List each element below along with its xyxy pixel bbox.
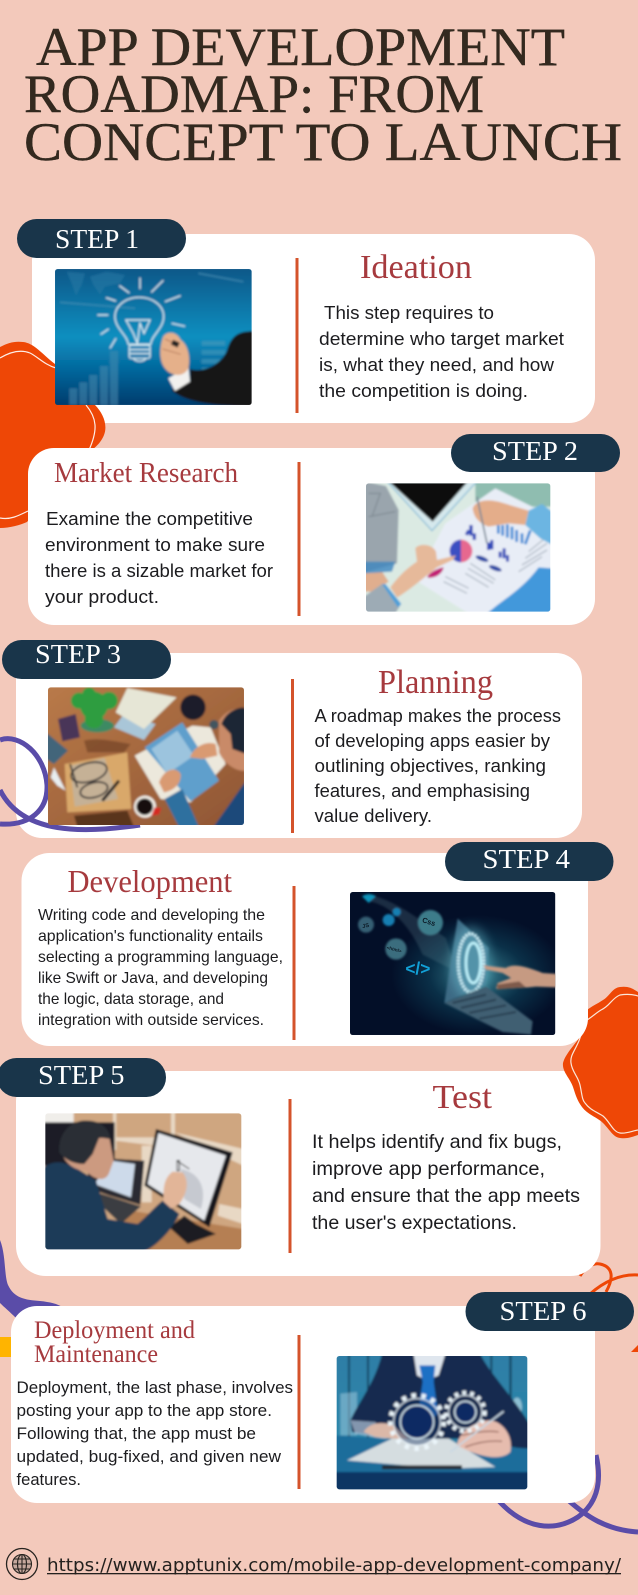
panel: step 4 development [22, 842, 614, 1046]
divider [298, 1335, 300, 1489]
body text: deployment: Following that, the app must be [16, 1425, 256, 1443]
divider [288, 1099, 292, 1253]
body text: ideation: This step requires to [324, 302, 494, 323]
panel: step 6 deployment and maintenance [11, 1292, 634, 1503]
body text: market research: environment to make sure [45, 534, 265, 555]
heading: market research: Market Research [54, 457, 238, 489]
photo: finger touching laptop with code icons: JS [362, 923, 370, 930]
body text: test: and ensure that the app meets [312, 1185, 580, 1207]
title: APP DEVELOPMENT [36, 17, 565, 77]
heading: development: Development [68, 863, 232, 899]
footer link [6, 1548, 622, 1580]
heading: test: Test [432, 1079, 493, 1116]
title: CONCEPT TO LAUNCH [24, 112, 622, 172]
body text: development [38, 907, 283, 1029]
step 4 badge [445, 842, 614, 881]
divider [296, 258, 298, 413]
decoration: purple loop bottom right [498, 1455, 638, 1532]
body text: planning: outlining objectives, ranking [314, 755, 546, 776]
body text: deployment: Deployment, the last phase, involves [16, 1379, 293, 1397]
heading: ideation: Ideation [360, 249, 472, 286]
body text: deployment: features. [16, 1471, 81, 1489]
decoration: purple loop left [0, 739, 140, 830]
body text: planning: value delivery. [314, 805, 432, 826]
step 6 badge: STEP 6 [500, 1296, 586, 1326]
body text: development: the logic, data storage, and [38, 991, 224, 1008]
decoration: orange squiggle top right [580, 1264, 638, 1352]
photo: finger touching laptop with code icons [350, 892, 557, 1035]
step 4 badge: STEP 4 [482, 844, 571, 874]
body text: ideation: the competition is doing. [319, 380, 528, 401]
body text: deployment: updated, bug-fixed, and given new [16, 1448, 281, 1466]
decoration: purple curve bottom left [0, 1240, 62, 1318]
photo: hands over charts [364, 481, 552, 614]
body text: development: application's functionality entails [38, 928, 263, 945]
body text: market research [45, 508, 273, 607]
photo: finger touching laptop with code icons: Css [421, 915, 437, 928]
body text: market research: there is a sizable market for [45, 560, 273, 581]
panel: step 1 ideation [17, 219, 564, 413]
body text: ideation: determine who target market [319, 328, 564, 349]
divider [292, 886, 296, 1040]
decoration: orange blob right [563, 987, 638, 1138]
body text: planning: of developing apps easier by [314, 730, 551, 751]
body text: market research: your product. [45, 586, 159, 607]
body text: ideation: is, what they need, and how [319, 354, 555, 375]
photo: light bulb drawn by hand [53, 268, 253, 406]
body text: test [312, 1131, 580, 1234]
photo: desk seen from above [46, 685, 246, 827]
photo: businessman with gears [335, 1354, 529, 1491]
photo: man working at monitor [43, 1111, 243, 1251]
step 1 badge [17, 219, 186, 258]
decoration: yellow block left [0, 1337, 14, 1357]
card background: step 5 [16, 1071, 600, 1276]
heading: deployment and maintenance: Deployment and [34, 1317, 195, 1344]
card background: step 1 [32, 234, 595, 423]
body text: deployment: posting your app to the app store. [16, 1402, 272, 1420]
photo: finger touching laptop with code icons: <html> [386, 945, 402, 954]
heading: planning: Planning [378, 664, 493, 701]
body text: market research: Examine the competitive [46, 508, 253, 529]
body text: development: like Swift or Java, and developing [38, 970, 268, 987]
card [11, 1306, 595, 1503]
body text: planning: features, and emphasising [314, 780, 530, 801]
step 3 badge: STEP 3 [35, 639, 121, 669]
title: ROADMAP: FROM [24, 64, 484, 124]
icon: globe [6, 1548, 38, 1580]
panel: step 5 test [0, 1058, 580, 1253]
body text: ideation [319, 302, 564, 401]
card [22, 853, 588, 1046]
panel: step 3 planning [2, 639, 561, 833]
card background: step 3 [16, 653, 582, 838]
step 5 badge: STEP 5 [38, 1060, 124, 1090]
step 2 badge: STEP 2 [492, 436, 578, 466]
body text: deployment [16, 1379, 293, 1489]
body text: test: the user's expectations. [312, 1212, 517, 1234]
body text: development: integration with outside services. [38, 1012, 264, 1029]
step 2 badge [451, 434, 620, 472]
heading: deployment and maintenance: Maintenance [34, 1341, 158, 1368]
heading: deployment and maintenance [34, 1317, 195, 1368]
divider [291, 679, 294, 833]
body text: test: improve app performance, [312, 1158, 545, 1180]
url text: https://www.apptunix.com/mobile-app-development-company/ [47, 1555, 622, 1576]
step 6 badge [466, 1292, 634, 1331]
body text: test: It helps identify and fix bugs, [312, 1131, 562, 1153]
panel: step 2 market research [28, 434, 620, 625]
body text: planning: A roadmap makes the process [314, 705, 561, 726]
step 1 badge: STEP 1 [55, 224, 139, 254]
step 5 badge [0, 1058, 166, 1097]
body text: planning [314, 705, 561, 826]
divider [298, 462, 300, 616]
decoration: orange blob left [0, 342, 105, 528]
body text: development: Writing code and developing the [38, 907, 265, 924]
photo: finger touching laptop with code icons: </> [405, 959, 430, 979]
step 3 badge [2, 639, 171, 679]
body text: development: selecting a programming language, [38, 949, 283, 966]
title [24, 17, 622, 172]
card [28, 448, 595, 625]
